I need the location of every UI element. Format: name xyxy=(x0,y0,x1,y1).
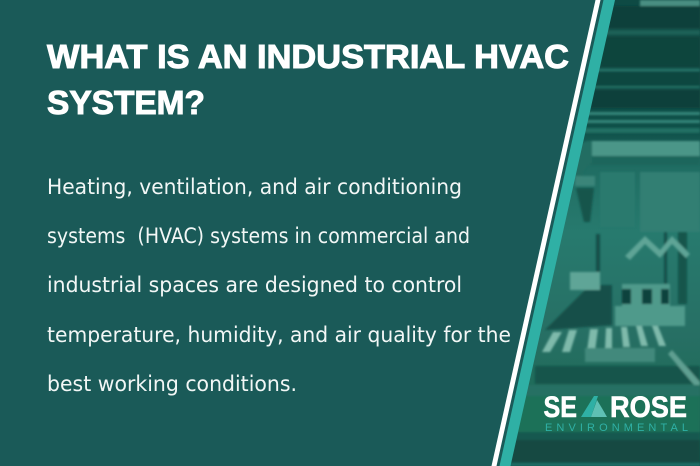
upper ducts xyxy=(580,0,700,133)
logo: Sea Rose Environmental: ROSE xyxy=(610,391,687,424)
title xyxy=(47,38,569,121)
logo: Sea Rose Environmental: ENVIRONMENTAL xyxy=(545,422,688,434)
photo: industrial plant interior xyxy=(500,0,700,466)
body text xyxy=(47,175,511,396)
body text: industrial spaces are designed to control xyxy=(47,273,462,297)
body text: best working conditions. xyxy=(47,372,297,396)
lower machine bed xyxy=(500,348,700,466)
body text: Heating, ventilation, and air conditioning xyxy=(47,175,462,199)
title: WHAT IS AN INDUSTRIAL HVAC xyxy=(47,38,569,75)
teal diagonal stripe xyxy=(500,0,615,466)
conveyor rollers xyxy=(542,326,666,352)
logo: Sea Rose Environmental: SE xyxy=(544,391,577,424)
white diagonal stripe xyxy=(492,0,600,466)
title: SYSTEM? xyxy=(47,84,205,121)
logo: Sea Rose Environmental xyxy=(544,391,688,434)
body text: systems (HVAC) systems in commercial and xyxy=(47,224,470,248)
icon: wave sail A xyxy=(581,396,607,417)
large pipe xyxy=(572,141,700,222)
body text: temperature, humidity, and air quality for the xyxy=(47,323,511,347)
mid machinery xyxy=(545,172,700,330)
